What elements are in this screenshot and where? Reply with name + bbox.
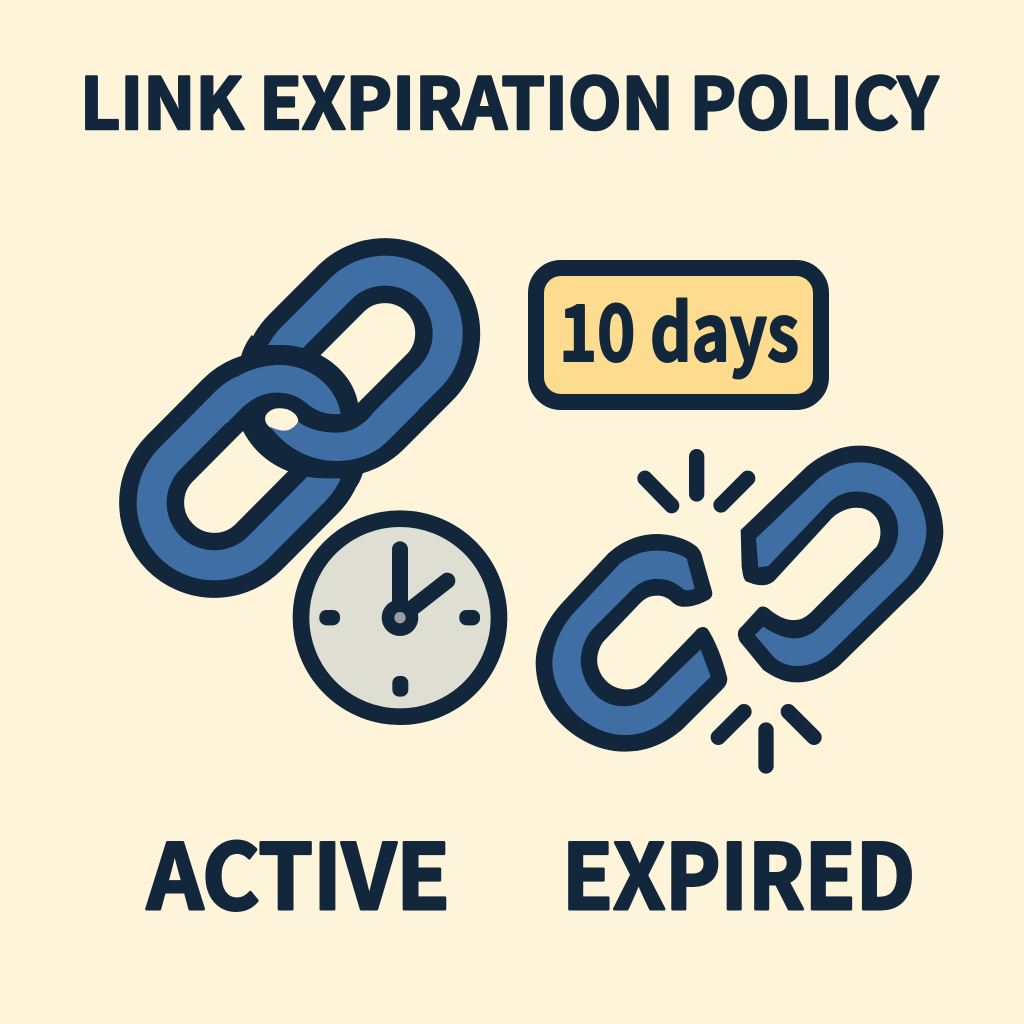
badge: 10 days: 10 days: [559, 272, 799, 384]
icon: clock: [301, 519, 499, 717]
label: active: ACTIVE: [146, 805, 450, 935]
icon: interlocked active chain: [152, 271, 448, 565]
title: LINK EXPIRATION POLICY: [80, 48, 939, 150]
label: expired: EXPIRED: [562, 805, 915, 935]
icon: broken chain: [536, 446, 943, 766]
